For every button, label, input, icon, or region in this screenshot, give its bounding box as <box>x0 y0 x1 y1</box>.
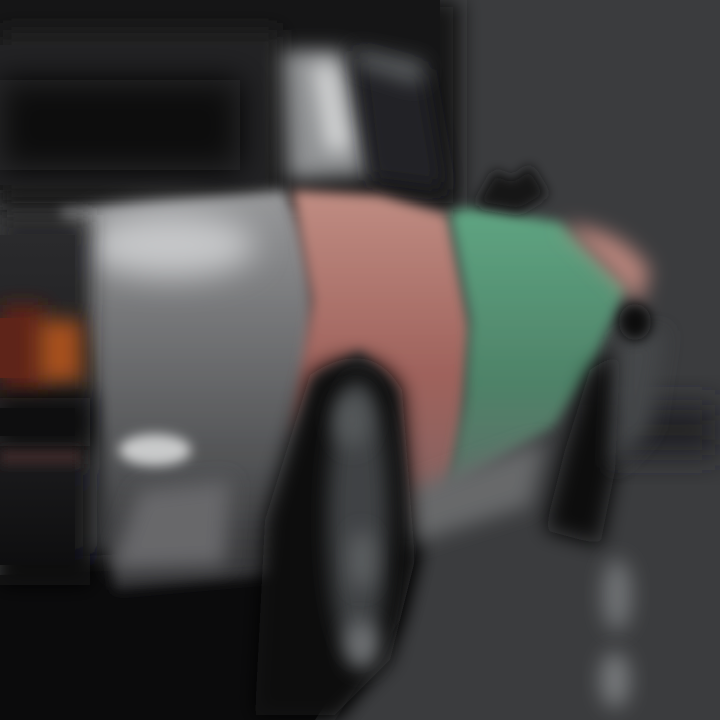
green panel <box>405 208 650 545</box>
road reflections <box>600 559 632 708</box>
dark rear bumper with tail light <box>0 215 90 585</box>
car roof and rear window <box>0 30 445 200</box>
mirror silhouette <box>475 165 548 212</box>
rear wheel <box>545 304 665 545</box>
silver rear panel <box>60 190 312 590</box>
front wheel <box>255 358 415 715</box>
pink panel <box>290 190 470 525</box>
